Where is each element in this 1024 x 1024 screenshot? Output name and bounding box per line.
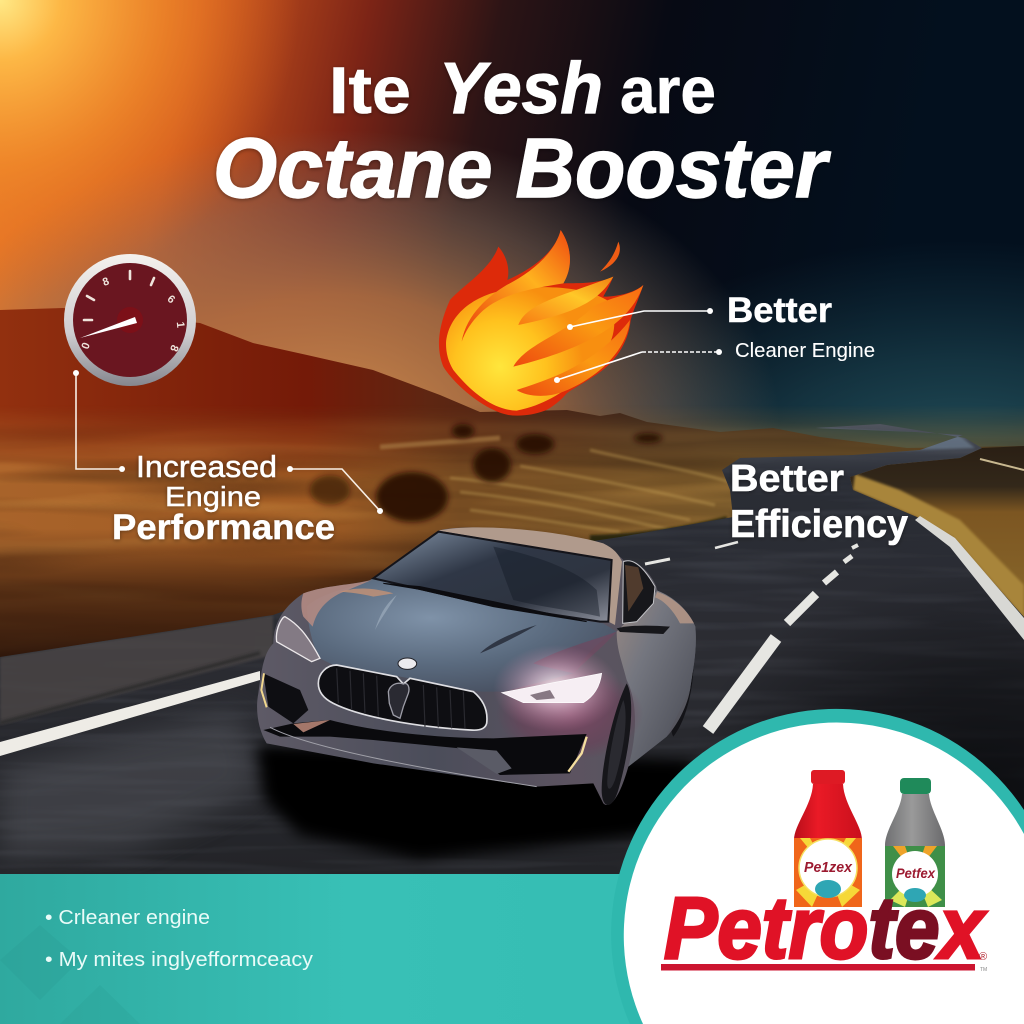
icon: green-capped bottle bbox=[885, 778, 945, 907]
panel: white product circle bbox=[611, 709, 1024, 1024]
road bbox=[0, 424, 1024, 874]
sports car bbox=[257, 527, 700, 860]
logo: Petrotex: TM bbox=[980, 967, 987, 973]
purple fender glow bbox=[497, 667, 643, 760]
panel: teal band bbox=[0, 874, 700, 1024]
icon: speedometer gauge: 6 bbox=[165, 293, 177, 306]
title bbox=[213, 49, 831, 215]
rear fender bbox=[617, 591, 696, 767]
benefit list: • Crleaner engine bbox=[45, 907, 210, 929]
grille bbox=[318, 665, 487, 730]
car body shell bbox=[257, 527, 696, 805]
icon: speedometer gauge: 0 bbox=[79, 341, 93, 351]
title: Ite bbox=[329, 53, 411, 127]
icon: red bottle bbox=[794, 770, 862, 907]
hood badge bbox=[398, 658, 417, 669]
callout: increased engine performance: Performance bbox=[112, 508, 335, 547]
lower air intakes bbox=[263, 673, 308, 723]
title: Yesh bbox=[439, 49, 603, 129]
side mirror bbox=[617, 626, 670, 634]
running lights bbox=[261, 673, 267, 707]
icon: speedometer gauge: 8 bbox=[101, 275, 111, 289]
grille emblem bbox=[388, 683, 409, 718]
callout: better cleaner engine bbox=[554, 291, 875, 383]
hills bbox=[0, 308, 1024, 500]
right headlight glow bbox=[493, 645, 620, 732]
background scene bbox=[0, 0, 1024, 680]
side window bbox=[623, 561, 655, 623]
callout: increased engine performance bbox=[73, 370, 383, 547]
title: are bbox=[620, 53, 716, 127]
gauge needle bbox=[80, 317, 137, 338]
icon: speedometer gauge bbox=[64, 254, 196, 386]
fields bbox=[0, 412, 1024, 657]
right headlight bbox=[502, 673, 602, 703]
rear wheel bbox=[671, 637, 694, 737]
icon: green-capped bottle: Petfex bbox=[896, 865, 936, 881]
callout: increased engine performance: Increased bbox=[136, 449, 277, 484]
icon: speedometer gauge: 1 bbox=[174, 321, 186, 328]
callout: better cleaner engine: Cleaner Engine bbox=[735, 340, 875, 362]
icon: flame bbox=[439, 230, 643, 416]
logo: Petrotex: ® bbox=[979, 951, 987, 963]
benefit list: • My mites inglyefformceacy bbox=[45, 949, 313, 971]
icon: speedometer gauge: 8 bbox=[167, 343, 181, 353]
front wheel bbox=[602, 683, 631, 805]
benefit list bbox=[45, 907, 313, 971]
callout: increased engine performance: Engine bbox=[165, 481, 261, 512]
windshield bbox=[373, 532, 612, 622]
road markings bbox=[0, 671, 260, 756]
callout: better cleaner engine: Better bbox=[727, 291, 832, 330]
hood bbox=[307, 578, 617, 692]
logo: Petrotex: Petrotex bbox=[664, 880, 987, 977]
title: Octane Booster bbox=[213, 121, 831, 215]
left headlight bbox=[276, 617, 320, 662]
callout: better efficiency: Better bbox=[730, 458, 844, 500]
roof bbox=[438, 527, 622, 625]
icon: red bottle: Pe1zex bbox=[804, 859, 853, 876]
callout: better efficiency: Efficiency bbox=[730, 503, 908, 546]
callout: better efficiency bbox=[730, 458, 908, 546]
